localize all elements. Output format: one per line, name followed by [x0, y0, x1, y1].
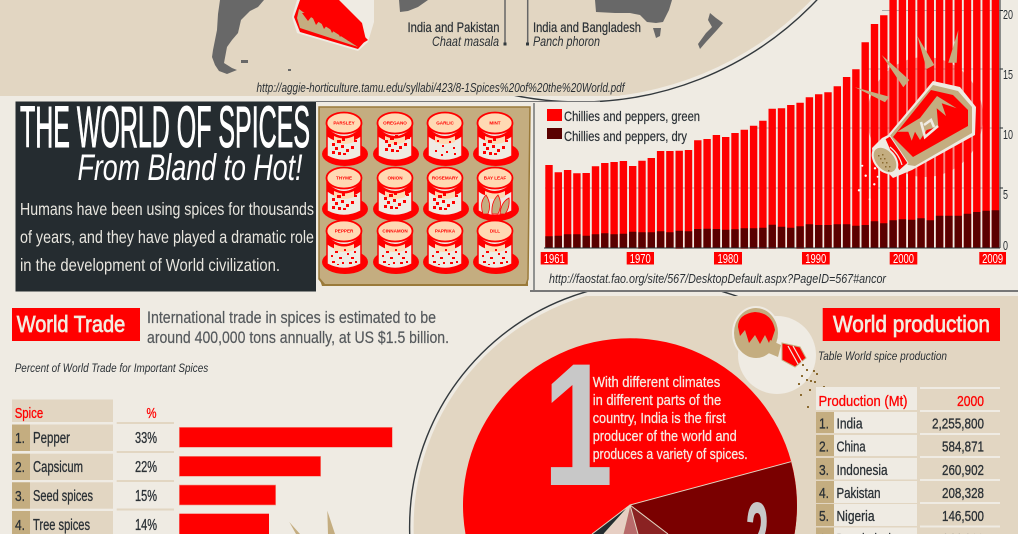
- map: South America: [212, 0, 291, 74]
- axis labels: 15: [1003, 67, 1013, 82]
- icon: spice sachet on map: [292, 0, 374, 51]
- year labels: 1980: [718, 251, 738, 266]
- legend: [547, 108, 700, 144]
- jar: pepper: PEPPER: [335, 228, 354, 234]
- jar: onion: [373, 168, 419, 221]
- row: Pakistan: [816, 481, 984, 503]
- row: Indonesia: Indonesia: [836, 462, 888, 479]
- jar: thyme: [322, 168, 368, 221]
- row: China: [816, 435, 984, 456]
- axis labels: [1003, 7, 1013, 253]
- legend: Chillies and peppers, green: [564, 108, 700, 124]
- pie text: [593, 374, 748, 463]
- axis labels: 20: [1003, 7, 1013, 22]
- row: China: 2.: [819, 438, 829, 456]
- row: tree spices: 14%: [135, 517, 157, 534]
- row: pepper: [12, 424, 392, 451]
- axis labels: 0: [1003, 238, 1008, 253]
- jar: garlic: GARLIC: [436, 120, 454, 126]
- row: seed spices: [12, 482, 276, 509]
- map: Australia: [595, 0, 672, 23]
- pie text: produces a variety of spices.: [593, 446, 748, 463]
- text: THE WORLD OF SPICES: [20, 95, 310, 160]
- axis: [544, 0, 1003, 248]
- row: capsicum: 2.: [15, 459, 25, 476]
- row: Indonesia: 3.: [819, 462, 829, 479]
- heading: world trade: World Trade: [17, 311, 125, 337]
- intro: trade: International trade in spices is estimated to be: [147, 308, 436, 327]
- row: Bangladesh: [816, 528, 984, 534]
- panel: world map header: [0, 0, 906, 102]
- pie text: country, India is the first: [593, 410, 726, 427]
- row: seed spices: Seed spices: [33, 488, 93, 505]
- icon: pepper shaker: [855, 30, 983, 200]
- row: China: 584,871: [942, 438, 984, 456]
- icon: falling salt: [858, 165, 879, 200]
- row: Indonesia: [816, 458, 984, 480]
- row: Nigeria: 146,500: [942, 508, 984, 525]
- source url: chart: http://faostat.fao.org/site/567/DesktopDefault.aspx?PageID=567#ancor: [549, 272, 887, 286]
- jar: thyme: THYME: [336, 176, 352, 180]
- jar: rosemary: ROSEMARY: [432, 176, 458, 180]
- row: seed spices: 3.: [15, 488, 25, 505]
- row: capsicum: Capsicum: [33, 459, 83, 476]
- row: Pakistan: Pakistan: [836, 485, 880, 502]
- panel: world production background: [410, 282, 1018, 534]
- label: India and Pakistan: Chaat masala: [432, 33, 499, 49]
- row: India: [816, 412, 984, 433]
- axis labels: 10: [1003, 127, 1013, 142]
- jar: mint: MINT: [489, 120, 501, 126]
- year labels: 1961: [544, 251, 565, 266]
- row: Nigeria: [816, 504, 984, 526]
- panel: spice rack: [319, 107, 530, 286]
- row: Nigeria: Nigeria: [836, 508, 875, 525]
- label: India and Bangladesh: Panch phoron: [533, 33, 600, 49]
- icon: spice grinder: [732, 306, 825, 408]
- intro text: in the development of World civilization.: [20, 255, 280, 275]
- row: pepper: Pepper: [33, 430, 70, 447]
- row: China: China: [836, 438, 866, 456]
- jar: paprika: PAPRIKA: [435, 228, 456, 234]
- row: Pakistan: 208,328: [942, 485, 984, 502]
- intro text: of years, and they have played a dramatic role: [20, 227, 314, 247]
- subtitle: From Bland to Hot!: [78, 147, 302, 188]
- bars: green: [545, 0, 999, 249]
- map: Tasmania: [653, 28, 661, 38]
- slice: India: 1: [543, 328, 613, 523]
- row: Pakistan: 4.: [819, 485, 829, 502]
- row: India: 2,255,800: [932, 416, 984, 432]
- axis labels: 5: [1003, 187, 1008, 202]
- panel: world trade: [12, 308, 449, 534]
- table: production: 2000: [957, 393, 984, 410]
- bars: dry: [545, 210, 999, 248]
- row: tree spices: [12, 511, 269, 534]
- row: tree spices: Tree spices: [33, 517, 90, 534]
- table: production: Production (Mt): [818, 393, 908, 410]
- table: trade: Spice: [15, 405, 43, 422]
- year labels: 2000: [893, 251, 914, 266]
- year labels: 2009: [982, 251, 1003, 266]
- intro text: [20, 199, 314, 275]
- table: trade: %: [146, 405, 156, 422]
- label: India and Bangladesh: India and Bangladesh: [533, 19, 641, 35]
- row: capsicum: [12, 454, 321, 480]
- row: pepper: 1.: [15, 430, 25, 447]
- jar: oregano: [373, 112, 419, 166]
- caption: trade table: Percent of World Trade for Important Spices: [15, 361, 208, 375]
- icon: spice grains: [798, 364, 825, 408]
- map: Africa tip: [399, 0, 428, 12]
- jar: rosemary: [423, 168, 469, 221]
- row: seed spices: 15%: [135, 488, 157, 505]
- label: India and Pakistan: [408, 0, 506, 49]
- source url: map: http://aggie-horticulture.tamu.edu/syllabi/423/8-1Spices%20of%20the%20World.pdf: [256, 81, 626, 95]
- icon: rays: [855, 30, 958, 102]
- jar: parsley: PARSLEY: [333, 120, 355, 126]
- pie text: in different parts of the: [593, 392, 721, 409]
- pie chart: [463, 328, 797, 534]
- row: India: 1.: [819, 416, 829, 432]
- jar: dill: DILL: [490, 228, 500, 234]
- small slices: [592, 462, 791, 534]
- jar: mint: [473, 112, 519, 166]
- year labels: [541, 251, 1006, 266]
- table: trade: [12, 400, 392, 534]
- icon: rays bottom: [289, 511, 335, 534]
- map: New Zealand: [698, 13, 723, 49]
- row: Indonesia: 260,902: [942, 462, 984, 479]
- slice: China: [630, 462, 797, 534]
- legend: Chillies and peppers, dry: [564, 128, 687, 144]
- jar: cinnamon: [373, 220, 419, 274]
- intro text: Humans have been using spices for thousands: [20, 199, 314, 219]
- label: India and Bangladesh: [526, 0, 641, 49]
- pie text: With different climates: [593, 374, 720, 391]
- jar: bay leaf: BAY LEAF: [484, 176, 506, 180]
- jar: bay leaf: [473, 168, 519, 221]
- row: capsicum: 22%: [135, 459, 157, 476]
- pie text: producer of the world and: [593, 428, 737, 445]
- panel: chillies and peppers chart: [316, 0, 1018, 291]
- year labels: 1970: [630, 251, 651, 266]
- jar: pepper: [322, 220, 368, 274]
- label: India and Pakistan: India and Pakistan: [408, 19, 500, 35]
- jar: onion: ONION: [387, 176, 403, 180]
- jar: garlic: [423, 112, 469, 166]
- row: tree spices: 4.: [15, 517, 25, 534]
- jar: dill: [473, 220, 519, 274]
- table: production: [816, 387, 1000, 534]
- year labels: 1990: [805, 251, 826, 266]
- panel: world production table: [816, 308, 1000, 534]
- intro: trade: [147, 308, 449, 347]
- heading: world production: World production: [833, 311, 990, 337]
- jar: paprika: [423, 220, 469, 274]
- row: Nigeria: 5.: [819, 508, 829, 525]
- intro: trade: around 400,000 tons annually, at US $1.5 billion.: [147, 328, 449, 347]
- jar: oregano: OREGANO: [383, 120, 407, 126]
- panel: title block: [16, 95, 316, 292]
- caption: production table: Table World spice production: [818, 349, 947, 363]
- row: pepper: 33%: [135, 430, 157, 447]
- jar: parsley: [322, 112, 368, 166]
- row: India: India: [836, 416, 863, 432]
- jar: cinnamon: CINNAMON: [382, 228, 408, 234]
